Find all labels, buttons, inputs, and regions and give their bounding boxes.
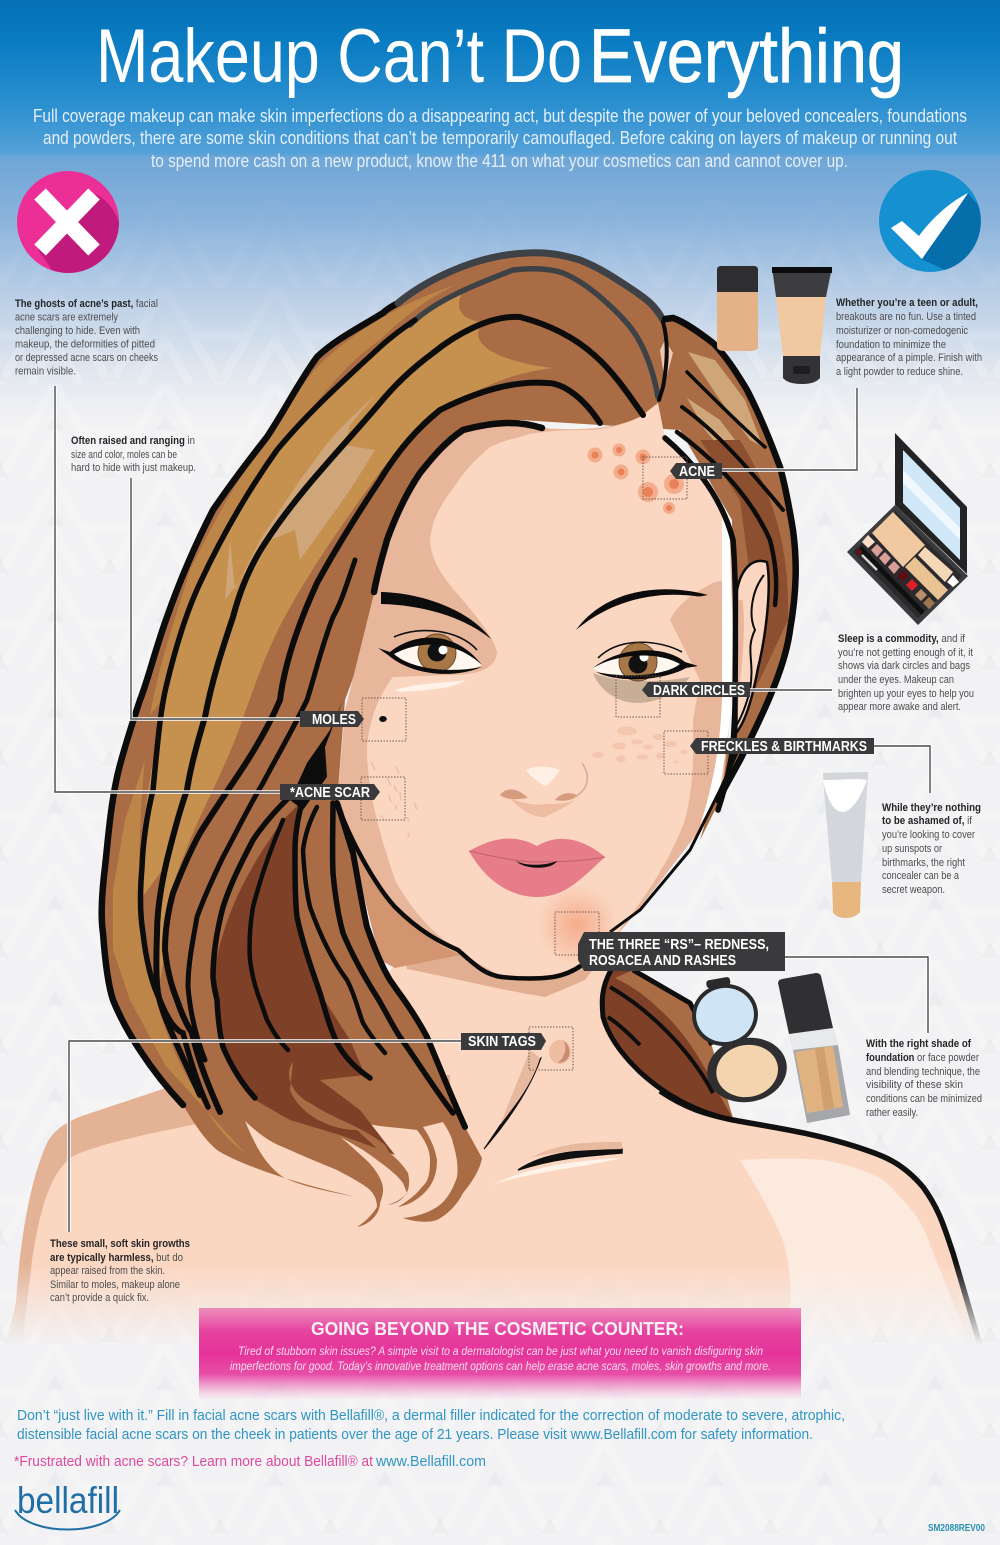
text: acne scars caption: acne scars are extremely bbox=[15, 312, 118, 324]
outer outline left bbox=[102, 302, 400, 1105]
text: freckles caption: concealer can be a bbox=[882, 870, 960, 882]
dashed target boxes bbox=[361, 457, 708, 1070]
code: SM2088REV00: SM2088REV00 bbox=[928, 1523, 985, 1534]
ear bbox=[732, 561, 769, 738]
lobe part line bbox=[659, 322, 667, 400]
compact mirror bbox=[686, 973, 763, 1051]
right back hair lock bbox=[602, 970, 733, 1120]
hair base with lower tips bbox=[102, 253, 796, 1227]
inner grey strand bbox=[410, 269, 658, 397]
face bbox=[337, 340, 769, 1064]
text: freckles caption: birthmarks, the right bbox=[882, 857, 965, 869]
mole bbox=[379, 716, 387, 722]
clavicle bbox=[518, 1149, 622, 1170]
acne scars bbox=[371, 762, 417, 837]
label: the three Rs bbox=[578, 932, 785, 971]
label: dark circles: DARK CIRCLES bbox=[653, 683, 745, 699]
text: three Rs caption: foundation or face powder bbox=[866, 1052, 979, 1064]
text: moles caption: Often raised and ranging in bbox=[71, 435, 195, 447]
footer text: Don’t “just live with it.” Fill in facial acne scars with Bellafill®, a dermal filler indicated for the correction of moderate to severe, atrophic, bbox=[17, 1407, 845, 1424]
icon: X in pink circle bbox=[17, 171, 119, 273]
black mass beside cheek bbox=[290, 700, 343, 810]
neck line bbox=[484, 1058, 541, 1149]
icon: bottle bbox=[717, 266, 758, 351]
text: freckles caption bbox=[882, 802, 981, 896]
text: acne caption: Whether you’re a teen or adult, bbox=[836, 297, 978, 309]
banner body: imperfections for good. Today’s innovative treatment options can help erase acne scars, moles, skin growths and more. bbox=[230, 1359, 771, 1373]
text: dark circles caption: under the eyes. Makeup can bbox=[838, 674, 954, 686]
white cheek highlight bbox=[395, 680, 466, 692]
text: skin tags caption: appear raised from the skin. bbox=[50, 1265, 165, 1277]
text: moles caption bbox=[71, 435, 196, 474]
footer text: www.Bellafill.com bbox=[375, 1453, 486, 1470]
text: three Rs caption: With the right shade of bbox=[866, 1038, 971, 1050]
shoulder outline right bbox=[660, 1091, 980, 1345]
text: three Rs caption: visibility of these skin bbox=[866, 1079, 963, 1091]
compact and foundation bottle bbox=[686, 973, 850, 1123]
banner heading: GOING BEYOND THE COSMETIC COUNTER: bbox=[311, 1319, 684, 1339]
connector lines bbox=[55, 386, 930, 1232]
intro paragraph: to spend more cash on a new product, know the 411 on what your cosmetics can and cannot cover up. bbox=[151, 150, 848, 171]
products: foundation bottle and tube bbox=[717, 266, 832, 384]
icon: tube bbox=[772, 267, 832, 384]
footer text: distensible facial acne scars on the cheek in patients over the age of 21 years. Please visit www.Bellafill.com for safety information. bbox=[17, 1426, 813, 1443]
hair strands and outlines bbox=[102, 253, 796, 1127]
jaw line bbox=[337, 803, 582, 978]
illustration: woman portrait bbox=[5, 253, 980, 1345]
text: dark circles caption: brighten up your eyes to help you bbox=[838, 688, 974, 700]
title: Everything bbox=[589, 14, 904, 99]
text: three Rs caption: and blending technique, the bbox=[866, 1066, 980, 1078]
left eye bbox=[378, 631, 482, 674]
banner body bbox=[230, 1344, 771, 1373]
compact base bbox=[702, 1032, 792, 1108]
text: dark circles caption: appear more awake and alert. bbox=[838, 701, 961, 713]
nose bbox=[500, 763, 587, 817]
rash bbox=[537, 885, 617, 965]
text: acne scars caption: remain visible. bbox=[15, 366, 76, 378]
text: skin tags caption: are typically harmless, but do bbox=[50, 1252, 183, 1264]
palette lid bbox=[895, 433, 967, 574]
logo: bellafill: bellafill bbox=[17, 1480, 119, 1521]
palette base bbox=[847, 505, 968, 625]
freckles bbox=[592, 726, 688, 764]
text: acne caption: foundation to minimize the bbox=[836, 339, 946, 351]
main hair bbox=[102, 253, 796, 1227]
crown grey outline bbox=[398, 253, 663, 320]
neck shadow below jaw bbox=[320, 880, 600, 1122]
text: dark circles caption bbox=[838, 633, 974, 713]
footer text: *Frustrated with acne scars? Learn more about Bellafill® at bbox=[14, 1453, 374, 1470]
concealer tube bbox=[823, 772, 868, 918]
text: moles caption: hard to hide with just makeup. bbox=[71, 462, 196, 474]
acne bbox=[588, 444, 684, 514]
text: acne caption: moisturizer or non-comedogenic bbox=[836, 325, 968, 337]
skin tag bbox=[549, 1040, 571, 1064]
footer text bbox=[14, 1407, 845, 1470]
text: three Rs caption bbox=[866, 1038, 982, 1119]
text: dark circles caption: you’re not getting enough of it, it bbox=[838, 647, 973, 659]
text: freckles caption: While they’re nothing bbox=[882, 802, 981, 814]
text: acne scars caption: or depressed acne scars on cheeks bbox=[15, 352, 158, 364]
icon: check in blue circle bbox=[879, 170, 981, 272]
background sky gradient bbox=[0, 0, 1000, 420]
text: moles caption: size and color, moles can be bbox=[71, 449, 177, 461]
right hair outline bbox=[665, 318, 796, 800]
label: freckles and birthmarks: FRECKLES & BIRTHMARKS bbox=[701, 739, 867, 755]
text: freckles caption: to be ashamed of, if bbox=[882, 815, 973, 827]
label: the three Rs: ROSACEA AND RASHES bbox=[589, 953, 736, 969]
hair dark under layer bbox=[213, 800, 395, 1155]
text: skin tags caption: Similar to moles, makeup alone bbox=[50, 1279, 180, 1291]
label: acne scar: *ACNE SCAR bbox=[290, 785, 370, 801]
text: freckles caption: secret weapon. bbox=[882, 884, 945, 896]
text: acne scars caption bbox=[15, 298, 158, 378]
text: acne caption: breakouts are no fun. Use a tinted bbox=[836, 311, 976, 323]
palette bbox=[847, 433, 968, 625]
lips bbox=[469, 839, 605, 897]
label: the three Rs: THE THREE “RS”– REDNESS, bbox=[589, 937, 769, 953]
hair tan patches bbox=[150, 285, 456, 715]
text: dark circles caption: Sleep is a commodity, and if bbox=[838, 633, 966, 645]
text: freckles caption: you’re looking to cover bbox=[882, 829, 975, 841]
foundation bottle bbox=[789, 1028, 850, 1123]
right eye bbox=[593, 642, 698, 681]
intro paragraph bbox=[33, 105, 967, 171]
text: acne scars caption: makeup, the deformities of pitted bbox=[15, 338, 155, 350]
hairline bbox=[374, 423, 542, 592]
text: acne caption: a light powder to reduce shine. bbox=[836, 366, 963, 378]
right hair strands bbox=[687, 372, 765, 447]
label: skin tags: SKIN TAGS bbox=[468, 1034, 536, 1050]
dark circle bbox=[593, 673, 690, 703]
text: skin tags caption: These small, soft skin growths bbox=[50, 1238, 190, 1250]
text: skin tags caption: can’t provide a quick fix. bbox=[50, 1292, 149, 1304]
text: freckles caption: up sunspots or bbox=[882, 843, 942, 855]
header bbox=[33, 14, 967, 171]
label: acne: ACNE bbox=[679, 464, 715, 480]
label: moles: MOLES bbox=[312, 712, 356, 728]
text: acne caption bbox=[836, 297, 982, 378]
title: Makeup Can’t Do bbox=[96, 14, 582, 99]
text: skin tags caption bbox=[50, 1238, 190, 1304]
text: acne scars caption: The ghosts of acne’s past, facial bbox=[15, 298, 158, 310]
right eyebrow bbox=[576, 589, 708, 630]
banner: going beyond the cosmetic counter bbox=[199, 1308, 801, 1400]
text: three Rs caption: rather easily. bbox=[866, 1107, 918, 1119]
text: acne scars caption: challenging to hide. Even with bbox=[15, 325, 140, 337]
text: dark circles caption: shows via dark circles and bags bbox=[838, 660, 970, 672]
left eyebrow bbox=[381, 592, 491, 639]
banner body: Tired of stubborn skin issues? A simple visit to a dermatologist can be just what you need to vanish disfiguring skin bbox=[238, 1344, 763, 1358]
shoulders and neck bbox=[5, 965, 980, 1345]
